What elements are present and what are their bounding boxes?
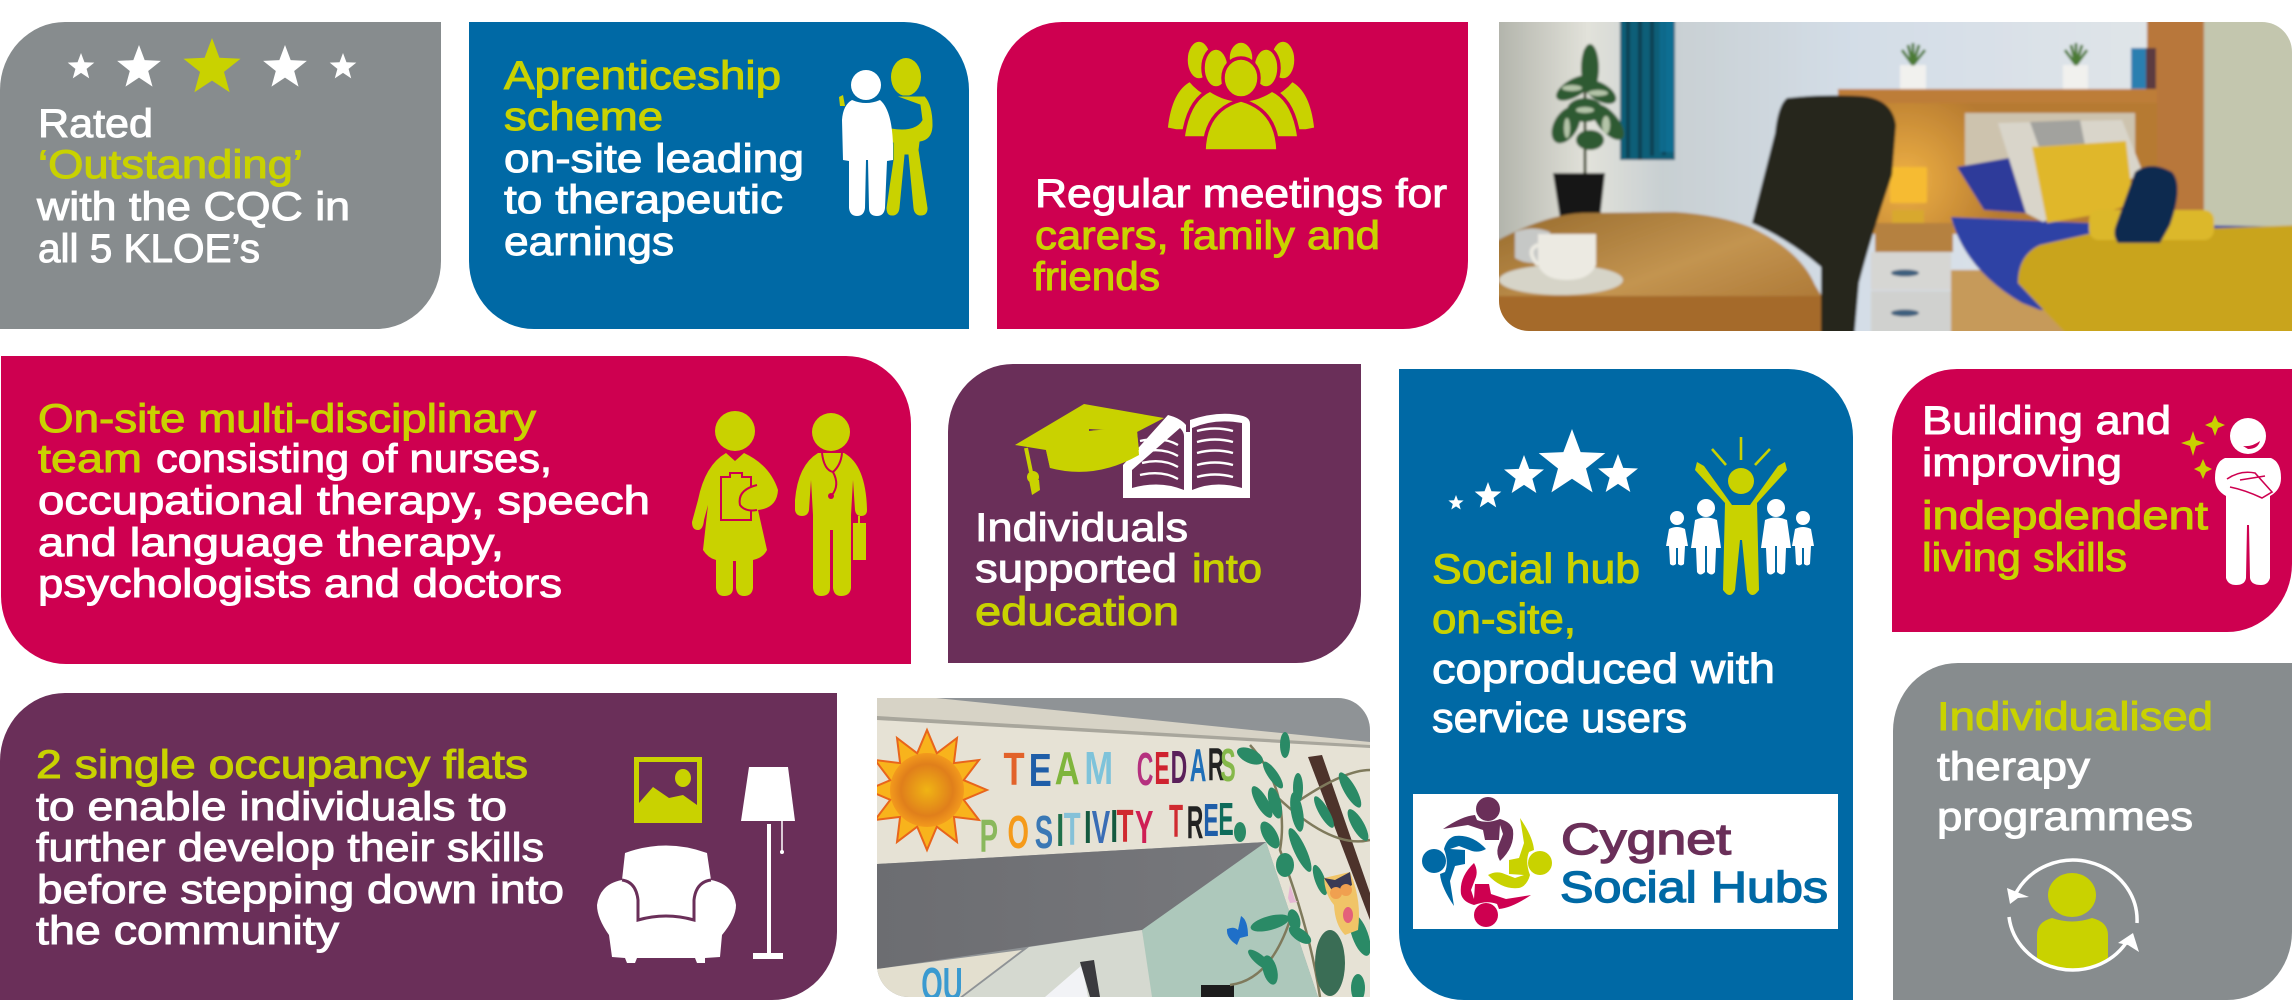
leaves and branches [1230,732,1375,1001]
text: apprenticeship scheme: Aprenticeship [504,54,781,98]
logo: cygnet social hubs [1413,794,1838,929]
icon: graduation cap [1015,404,1164,495]
wall lettering: positivity tree: S [1035,808,1053,859]
underside of beam [877,842,1266,969]
text: single occupancy flats [36,743,564,953]
logo text: Social Hubs [1560,863,1828,912]
wall lettering: positivity tree: I [1110,802,1118,853]
nightstand [1871,223,2071,335]
bed [1951,120,2292,340]
text: education [975,506,1262,634]
lamp [1890,167,1927,229]
wall lettering: positivity tree: T [1169,795,1183,847]
icon: celebrating person with group [1666,437,1814,595]
text: social hub: Social hub [1432,545,1640,592]
plant [1546,44,1630,218]
icon: group of people [1166,40,1316,151]
chair [1752,95,1896,340]
wall lettering: positivity tree: Y [1135,803,1153,854]
text: apprenticeship scheme: scheme [504,95,663,139]
cups [1499,228,1623,295]
headboard [1838,43,2157,234]
text: single occupancy flats: to enable individuals to [36,785,507,829]
text: single occupancy flats: further develop their skills [36,826,544,870]
green wall [1142,842,1318,997]
icon: armchair [597,846,736,963]
pale wall [963,930,1152,997]
icon: picture frame [634,757,702,823]
wall lettering: team cedars: T [1003,743,1025,795]
panel: education [948,364,1361,663]
text: multi-disciplinary team: psychologists and doctors [38,562,562,606]
window fragment [1045,960,1234,997]
text: rated outstanding: ‘Outstanding’ [38,143,303,187]
text: social hub [1432,545,1775,741]
text: regular meetings: Regular meetings for [1035,172,1447,216]
wall lettering: positivity tree: P [980,812,998,863]
pink butterfly [1288,885,1298,903]
wall lettering: team cedars: M [1084,742,1113,794]
owl [1324,872,1359,935]
text: apprenticeship scheme: on-site leading [504,137,804,181]
text: independent living skills: living skills [1922,536,2127,580]
icon: floor lamp [741,767,795,959]
panel: independent living skills [1892,369,2292,632]
panel: single occupancy flats [0,693,837,1000]
panel: therapy programmes [1893,663,2292,1000]
icon: rising stars [1448,429,1638,509]
text: multi-disciplinary team: consisting of nurses, [156,437,552,481]
text: multi-disciplinary team: occupational therapy, speech [38,479,650,523]
icon: five stars [68,38,356,92]
text: rated outstanding: all 5 KLOE’s [38,227,260,271]
text: rated outstanding: Rated [38,102,153,146]
text: independent living skills: Building and [1922,399,2171,443]
wall lettering: team cedars: E [1029,744,1052,796]
wall lettering: team cedars: R [1208,738,1224,790]
text: regular meetings: friends [1033,255,1160,299]
wall lettering: positivity tree: V [1092,803,1111,854]
text: therapy programmes: programmes [1937,795,2193,839]
wall lettering: positivity tree: I [1056,806,1064,857]
text: apprenticeship scheme [504,54,804,264]
icon: sparkles [2181,415,2225,479]
wall lettering: positivity tree [981,803,1233,852]
text: social hub: service users [1432,694,1687,741]
wall lettering: positivity tree: T [1064,805,1081,856]
text: multi-disciplinary team: team [38,437,142,481]
text: multi-disciplinary team [38,397,650,606]
text: multi-disciplinary team: and language therapy, [38,521,504,565]
wall lettering: positivity tree: I [1084,803,1092,854]
text: independent living skills: improving [1922,441,2122,485]
wall lettering: team cedars: A [1055,742,1080,794]
text: therapy programmes: Individualised [1937,695,2213,739]
butterfly [1227,916,1248,945]
text: regular meetings: carers, family and [1035,214,1380,258]
panel: apprenticeship scheme [469,22,969,329]
wall lettering: team cedars: C [1137,743,1153,795]
text: independent living skills: indepdendent [1922,494,2208,538]
wall lettering: team cedars: S [1220,739,1236,791]
text: education: supported [975,547,1177,591]
photo: team cedars positivity tree [867,698,1375,1001]
text: apprenticeship scheme: earnings [504,220,674,264]
text: education: education [975,590,1179,634]
icon: confident person [2215,418,2281,585]
text: social hub: coproduced with [1432,645,1775,692]
text: multi-disciplinary team: On-site multi-disciplinary [38,397,536,441]
desk [1499,210,1824,331]
wall lettering: team cedars: D [1171,741,1187,793]
cream wall [877,950,1022,997]
wall lettering: positivity tree: E [1203,794,1219,846]
dark disc [1315,930,1345,996]
text: single occupancy flats: 2 single occupancy flats [36,743,528,787]
wall lettering: positivity tree: T [1117,802,1133,853]
wall lettering: positivity tree: E [1218,793,1234,845]
panel: multi-disciplinary team [1,356,911,664]
text: rated outstanding [36,102,350,271]
text: therapy programmes: therapy [1937,745,2090,789]
icon: open book [1123,414,1250,498]
text: social hub: on-site, [1432,595,1576,642]
trunk [1308,755,1370,920]
text: single occupancy flats: the community [36,909,339,953]
text: apprenticeship scheme: to therapeutic [504,178,783,222]
icon: nurse [692,411,778,596]
text: independent living skills [1922,399,2208,580]
panel: rated outstanding [0,22,441,329]
text: education: into [1192,547,1262,591]
panel: regular meetings [997,22,1468,329]
wall lettering: positivity tree: O [1007,808,1029,859]
sun [867,730,987,850]
panel: social hub [1399,369,1853,1000]
icon: person with cycle arrows [2007,860,2139,972]
wall lettering: team cedars: A [1190,739,1206,791]
text: education: Individuals [975,506,1188,550]
logo text: Cygnet [1561,815,1731,864]
text: therapy programmes [1937,695,2213,839]
photo: bedroom [1499,22,2292,331]
icon: logo people circle [1422,797,1552,927]
text: rated outstanding: with the CQC in [36,185,350,229]
logo text [1560,815,1828,912]
wall lettering: team cedars: E [1154,742,1170,794]
wall lettering: positivity tree: R [1187,796,1203,848]
icon: doctor [795,413,867,596]
wall lettering: team cedars [1004,748,1235,786]
icon: two people supporting [839,58,933,216]
text: single occupancy flats: before stepping down into [37,868,564,912]
text: regular meetings [1033,172,1447,299]
